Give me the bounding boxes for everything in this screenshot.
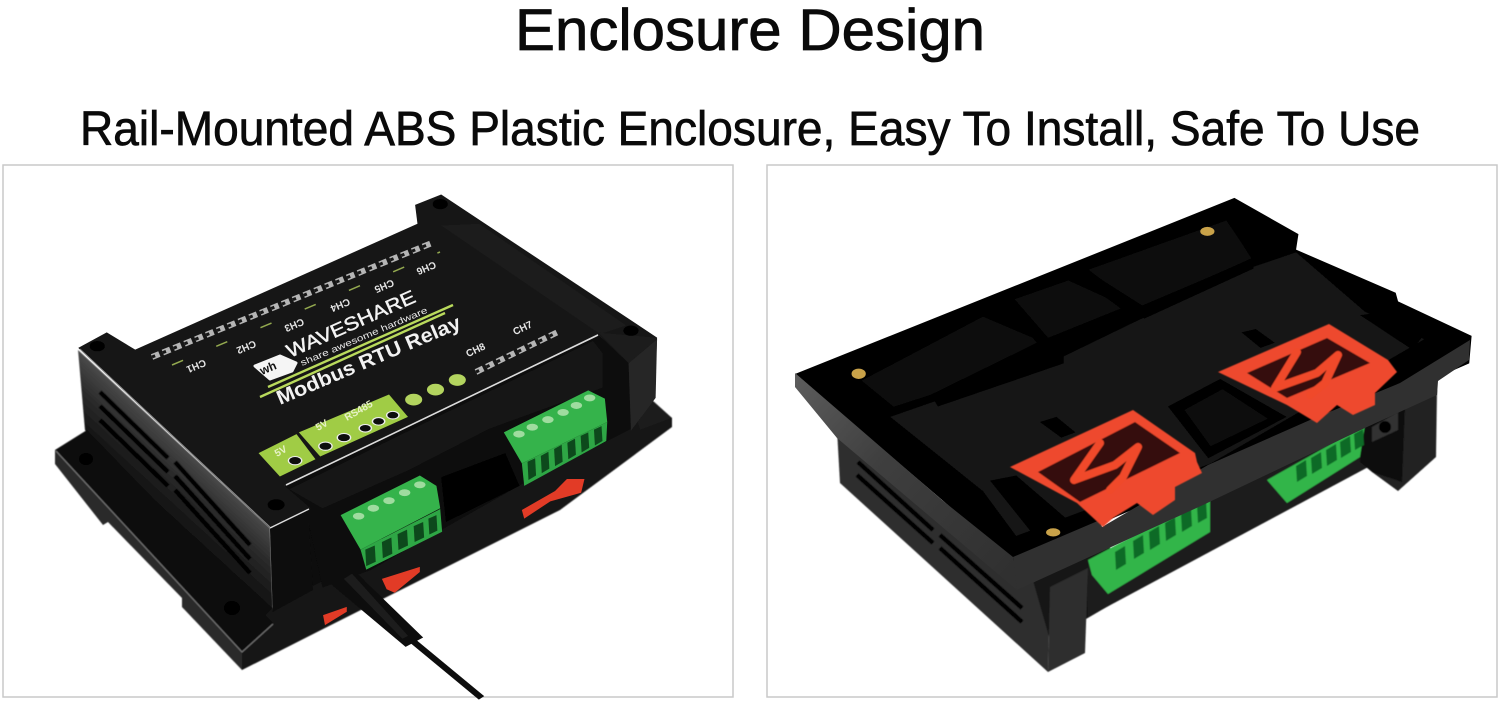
red DIN clips	[323, 479, 584, 625]
screw holes	[90, 341, 105, 351]
recessed front with PCB	[285, 334, 631, 588]
top-right panel	[1087, 220, 1251, 307]
device: enclosure lower body	[837, 390, 1437, 672]
device: left lip of plate	[795, 373, 1017, 590]
slot recesses	[990, 312, 1422, 543]
text: product name: Modbus RTU Relay	[273, 312, 465, 410]
label terminals	[288, 411, 399, 465]
green terminal block far	[504, 390, 607, 486]
rear leg	[1372, 390, 1437, 491]
panel: rear photo of enclosure	[767, 165, 1497, 697]
rail base front	[240, 395, 672, 670]
plate floor	[890, 252, 1424, 536]
subtitle: Rail-Mounted ABS Plastic Enclosure, Easy To Install, Safe To Use	[80, 103, 1420, 156]
under-lip backing	[1030, 530, 1110, 640]
window recess	[1168, 379, 1287, 458]
device: front lip of plate	[1013, 340, 1470, 590]
recess backing	[295, 440, 420, 610]
front corner pillar	[270, 510, 313, 612]
status LEDs	[405, 374, 466, 405]
terminal markings: top row	[152, 243, 440, 365]
plate base	[796, 198, 1472, 562]
green terminals left	[1088, 495, 1210, 594]
text: 5V label: 5V	[273, 444, 289, 460]
side vents	[857, 462, 1022, 622]
left side wall	[837, 430, 1050, 672]
left panel	[862, 317, 1040, 407]
right end wall	[598, 332, 657, 431]
top lid	[78, 194, 657, 528]
text: channel labels: CH5	[372, 276, 395, 294]
text: channel labels: CH2	[234, 337, 257, 355]
text: RS485 label: RS485	[343, 399, 375, 424]
device: relay module upper body	[78, 194, 657, 698]
red clip front	[1010, 410, 1202, 527]
front leg	[1048, 568, 1088, 672]
green terminals right	[1267, 425, 1365, 503]
brand arrow lines	[260, 305, 453, 397]
flange mounting holes	[79, 453, 93, 465]
text: brand name: WAVESHARE	[283, 287, 419, 363]
power label	[259, 434, 315, 477]
text: channel labels: CH7	[512, 319, 535, 338]
device: mounting plate	[796, 198, 1472, 562]
flange edge highlight	[56, 451, 273, 652]
text: brand tagline: share awesome hardware	[299, 305, 429, 368]
text: channel labels: CH8	[465, 341, 488, 360]
panel: front photo of relay enclosure	[3, 165, 733, 698]
rail base right end	[630, 398, 672, 430]
power and RS485 label	[299, 394, 408, 457]
side vents	[100, 392, 250, 573]
rear underside band	[1088, 420, 1372, 617]
logo badge	[255, 356, 296, 379]
gold rivets	[852, 227, 1214, 537]
device: relay module lower body	[55, 350, 672, 670]
terminal markings: CH7 and CH8 row	[476, 331, 560, 372]
raised black ribs	[931, 219, 1296, 407]
text: channel labels: CH1	[184, 356, 207, 374]
green terminal block near	[341, 475, 442, 570]
logo badge: wh	[257, 358, 279, 378]
text: channel labels: CH6	[414, 258, 437, 276]
text: channel labels	[184, 258, 535, 374]
red clip rear	[1218, 324, 1397, 423]
rail flange top	[55, 430, 273, 652]
text: channel labels: CH3	[282, 315, 305, 333]
text: channel labels: CH4	[328, 295, 351, 313]
lid edge highlights	[80, 335, 598, 528]
middle panel	[1009, 281, 1125, 341]
rail flange side	[55, 450, 242, 670]
side wall	[78, 350, 273, 640]
DC power jack area	[1360, 405, 1405, 482]
power cable	[323, 565, 482, 698]
text: second 5V label: 5V	[314, 418, 330, 434]
